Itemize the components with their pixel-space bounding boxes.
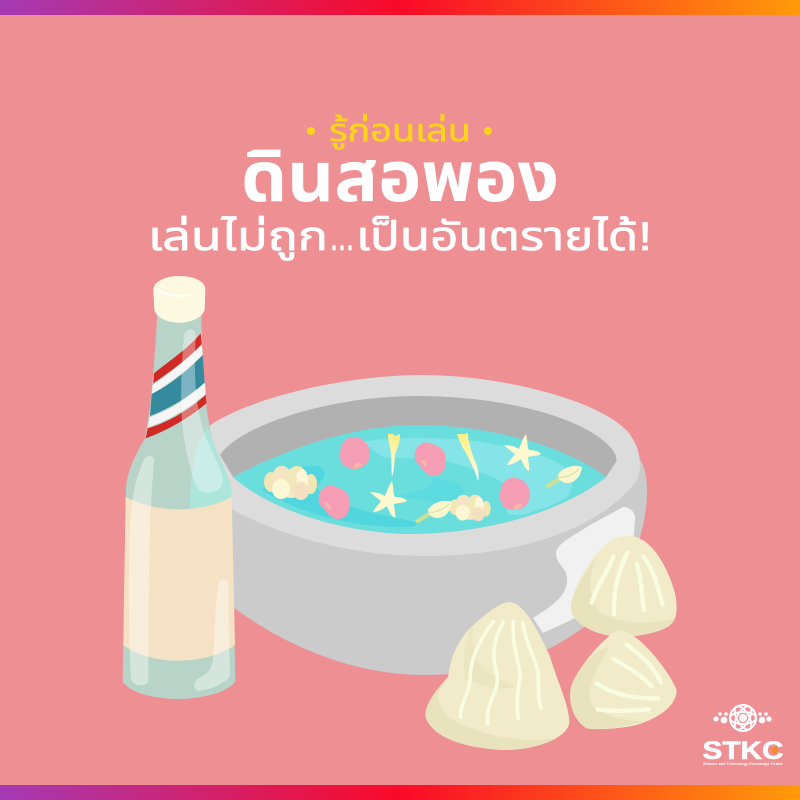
neck stripes [146, 333, 206, 438]
subtitle [148, 215, 652, 260]
top gradient bar [0, 0, 800, 15]
water [233, 425, 606, 534]
right highlight [194, 579, 230, 691]
bowl handle [533, 507, 635, 633]
illustration: mortar bowl [190, 375, 647, 675]
subtitle: เล่นไม่ถูก [148, 215, 328, 260]
floating jasmine stars [504, 434, 541, 471]
subtitle: เป็นอันตรายได้! [356, 215, 652, 259]
floating pandan strips [388, 434, 400, 477]
right ball [570, 629, 677, 729]
floating buds [546, 466, 582, 487]
floating petals [340, 437, 370, 469]
bottle label [123, 497, 235, 661]
kicker heading: รู้ก่อนเล่น [329, 113, 471, 149]
illustration: bottle [123, 276, 235, 699]
left highlight [129, 456, 154, 685]
bottom gradient bar [0, 785, 800, 800]
subtitle: ... [330, 215, 354, 259]
title: ดินสอพอง [241, 138, 559, 216]
neck highlight [181, 329, 223, 493]
front ball [426, 602, 569, 750]
logo atom mark [730, 704, 756, 732]
bowl rim [190, 375, 640, 556]
bottle cap [153, 276, 205, 323]
bowl body [190, 460, 647, 675]
bowl inner [220, 396, 617, 534]
illustration: powder balls [426, 536, 677, 750]
logo wordmark: STKC [702, 737, 784, 765]
logo tagline: Science and Technology Knowledge Center [703, 761, 783, 766]
kicker heading [307, 113, 492, 149]
logo dots [713, 712, 772, 723]
logo: STKC [702, 704, 784, 766]
back ball [571, 536, 677, 637]
floating lotus [264, 466, 317, 500]
bottle glass [123, 313, 235, 699]
bottle overlap with bowl [190, 427, 232, 510]
